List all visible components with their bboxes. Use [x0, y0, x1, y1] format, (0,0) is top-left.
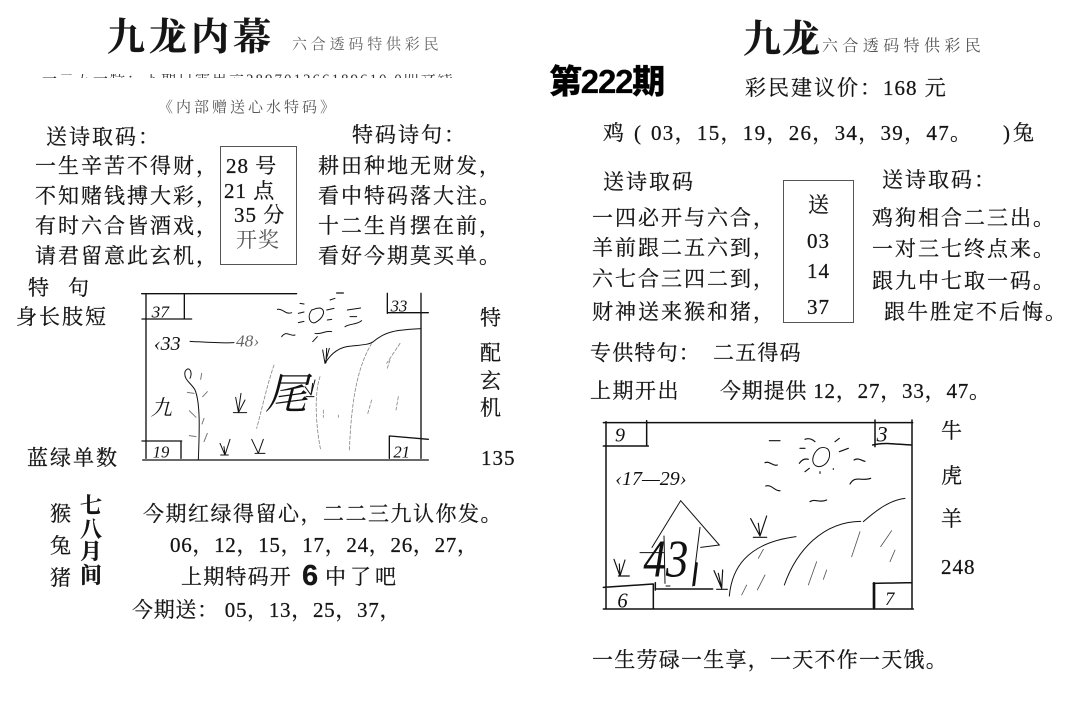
- box: draw time: 35 分: [234, 203, 285, 227]
- title: 九龙: 九龙: [743, 19, 821, 61]
- poem: left: 一生辛苦不得财，: [35, 154, 219, 178]
- side label: 特配玄机: 特: [480, 306, 501, 330]
- poem: right: 跟牛胜定不后悔。: [884, 300, 1068, 324]
- box: gift numbers: [783, 180, 854, 323]
- zodiac column: [50, 502, 71, 590]
- heading: 送诗取码 left: 送诗取码: [603, 170, 695, 194]
- heading: 送诗取码: 送诗取码：: [46, 125, 161, 149]
- heading: 特码诗句: 特码诗句：: [352, 123, 467, 147]
- poem: left: 羊前跟二五六到，: [592, 236, 776, 260]
- subtitle: 六合透码特供彩民: [822, 38, 985, 55]
- side label: 特配玄机: 配: [480, 341, 501, 365]
- zodiac column: 猪: [50, 566, 71, 590]
- side label: 特配玄机: 玄: [480, 369, 501, 393]
- poem: left: 请君留意此玄机，: [35, 244, 219, 268]
- sketch: left drawing: 尾: [265, 371, 313, 418]
- numbers: 鸡 row: ): [1003, 121, 1012, 145]
- poem: left: 有时六合皆酒戏，: [35, 214, 219, 238]
- sketch: right drawing: 7: [885, 589, 895, 610]
- numbers: 鸡 row: (: [634, 121, 643, 145]
- number: 135: 135: [481, 446, 516, 470]
- panel: left sheet: [16, 17, 516, 622]
- label: 特句: 特 句: [28, 276, 89, 300]
- label: 身长肢短: 身长肢短: [16, 305, 108, 329]
- poem: left: [592, 206, 776, 324]
- side column: 牛虎羊: 羊: [941, 507, 962, 531]
- poem: right: 鸡狗相合二三出。: [872, 206, 1056, 230]
- side column: 牛虎羊: [941, 419, 962, 531]
- numbers: 今期送: 今期送： 05，13，25，37，: [132, 598, 401, 622]
- price: 彩民建议价：168 元: [745, 76, 948, 100]
- sketch: left drawing: 九: [151, 396, 173, 420]
- poem: right: 跟九中七取一码。: [872, 269, 1056, 293]
- sketch: left drawing: 48›: [236, 332, 259, 351]
- sketch: left drawing: 37: [151, 302, 170, 321]
- poem: right: [872, 206, 1068, 324]
- last draw label: 上期开出: [590, 379, 680, 403]
- issue number: 第222期: [549, 63, 664, 100]
- box: gift numbers: 37: [807, 295, 830, 319]
- banner: 内部赠送心水特码: 《内部赠送心水特码》: [158, 100, 338, 116]
- subtitle: 六合透码特供彩民: [292, 37, 442, 53]
- sketch: left drawing: [141, 292, 429, 461]
- month column: 七八月间: 间: [80, 563, 102, 588]
- box: gift numbers: 03: [807, 229, 830, 253]
- sketch: right drawing: 6: [617, 590, 628, 612]
- zodiac column: 猴: [50, 502, 71, 526]
- poem: left: 六七合三四二到，: [592, 267, 776, 291]
- number: 248: 248: [941, 555, 976, 579]
- label: 蓝绿单数: 蓝绿单数: [27, 446, 119, 470]
- poem: right: 一对三七终点来。: [872, 237, 1056, 261]
- sketch: right drawing: ‹17—29›: [615, 468, 686, 490]
- heading: 送诗取码 right: 送诗取码：: [882, 168, 997, 192]
- poem: left: 一四必开与六合，: [592, 206, 776, 230]
- month column: 七八月间: 七: [80, 493, 102, 518]
- month column: 七八月间: 月: [80, 539, 102, 564]
- box: gift numbers: 14: [807, 259, 830, 283]
- poem: left: 不知赌钱搏大彩，: [35, 184, 219, 208]
- poem: right: 十二生肖摆在前，: [318, 214, 502, 238]
- zodiac column: 兔: [50, 534, 71, 558]
- offered numbers: 今期提供 12，27，33，47。: [720, 379, 991, 403]
- panel: right sheet: [549, 19, 1068, 672]
- numbers: 鸡 row: 鸡: [603, 121, 626, 145]
- sketch: right drawing: 9: [615, 425, 625, 447]
- text: 今期红绿: 今期红绿得留心，二二三九认你发。: [143, 502, 503, 526]
- text: last draw: 上期特码开: [181, 565, 292, 589]
- box: draw time: 开奖: [236, 228, 280, 252]
- poem: left: [35, 154, 219, 268]
- poem: left: 财神送来猴和猪，: [592, 300, 776, 324]
- month column: 七八月间: [80, 493, 102, 588]
- poem: right: 看中特码落大注。: [318, 184, 502, 208]
- sketch: right drawing: 43: [643, 529, 688, 589]
- box: draw time: 28 号: [226, 154, 277, 178]
- sketch: left drawing: 33: [390, 297, 407, 316]
- numbers row: 06，12，15，17，24，26，27，: [170, 533, 479, 557]
- poem: right: [318, 154, 502, 268]
- numbers: 鸡 row: 兔: [1013, 121, 1036, 145]
- side label: 特配玄机: 机: [480, 396, 501, 420]
- side label: 特配玄机: [480, 306, 501, 420]
- sketch: left drawing: 19: [153, 442, 170, 461]
- poem: right: 看好今期莫买单。: [318, 244, 502, 268]
- special phrase: 专供特句： 二五得码: [590, 341, 802, 365]
- sketch: right drawing: 3: [876, 422, 888, 447]
- side column: 牛虎羊: 牛: [941, 419, 962, 443]
- month column: 七八月间: 八: [80, 517, 102, 542]
- text: 中了吧: 中了吧: [325, 565, 400, 589]
- box: draw time: 21 点: [224, 179, 275, 203]
- sketch: left drawing: 21: [393, 442, 410, 461]
- sketch: left drawing: ‹33: [154, 333, 181, 355]
- box: draw time: [220, 146, 297, 265]
- sketch: right drawing: [602, 419, 914, 612]
- side column: 牛虎羊: 虎: [941, 464, 962, 488]
- big number 6: 6: [302, 560, 318, 592]
- poem: right: 耕田种地无财发，: [318, 154, 502, 178]
- box: gift numbers: 送: [808, 193, 829, 217]
- numbers: 鸡 row: 03，15，19，26，34，39，47。: [651, 121, 972, 145]
- closing line: 一生劳碌一生享，一天不作一天饿。: [592, 648, 948, 672]
- title: 九龙内幕: 九龙内幕: [107, 17, 275, 59]
